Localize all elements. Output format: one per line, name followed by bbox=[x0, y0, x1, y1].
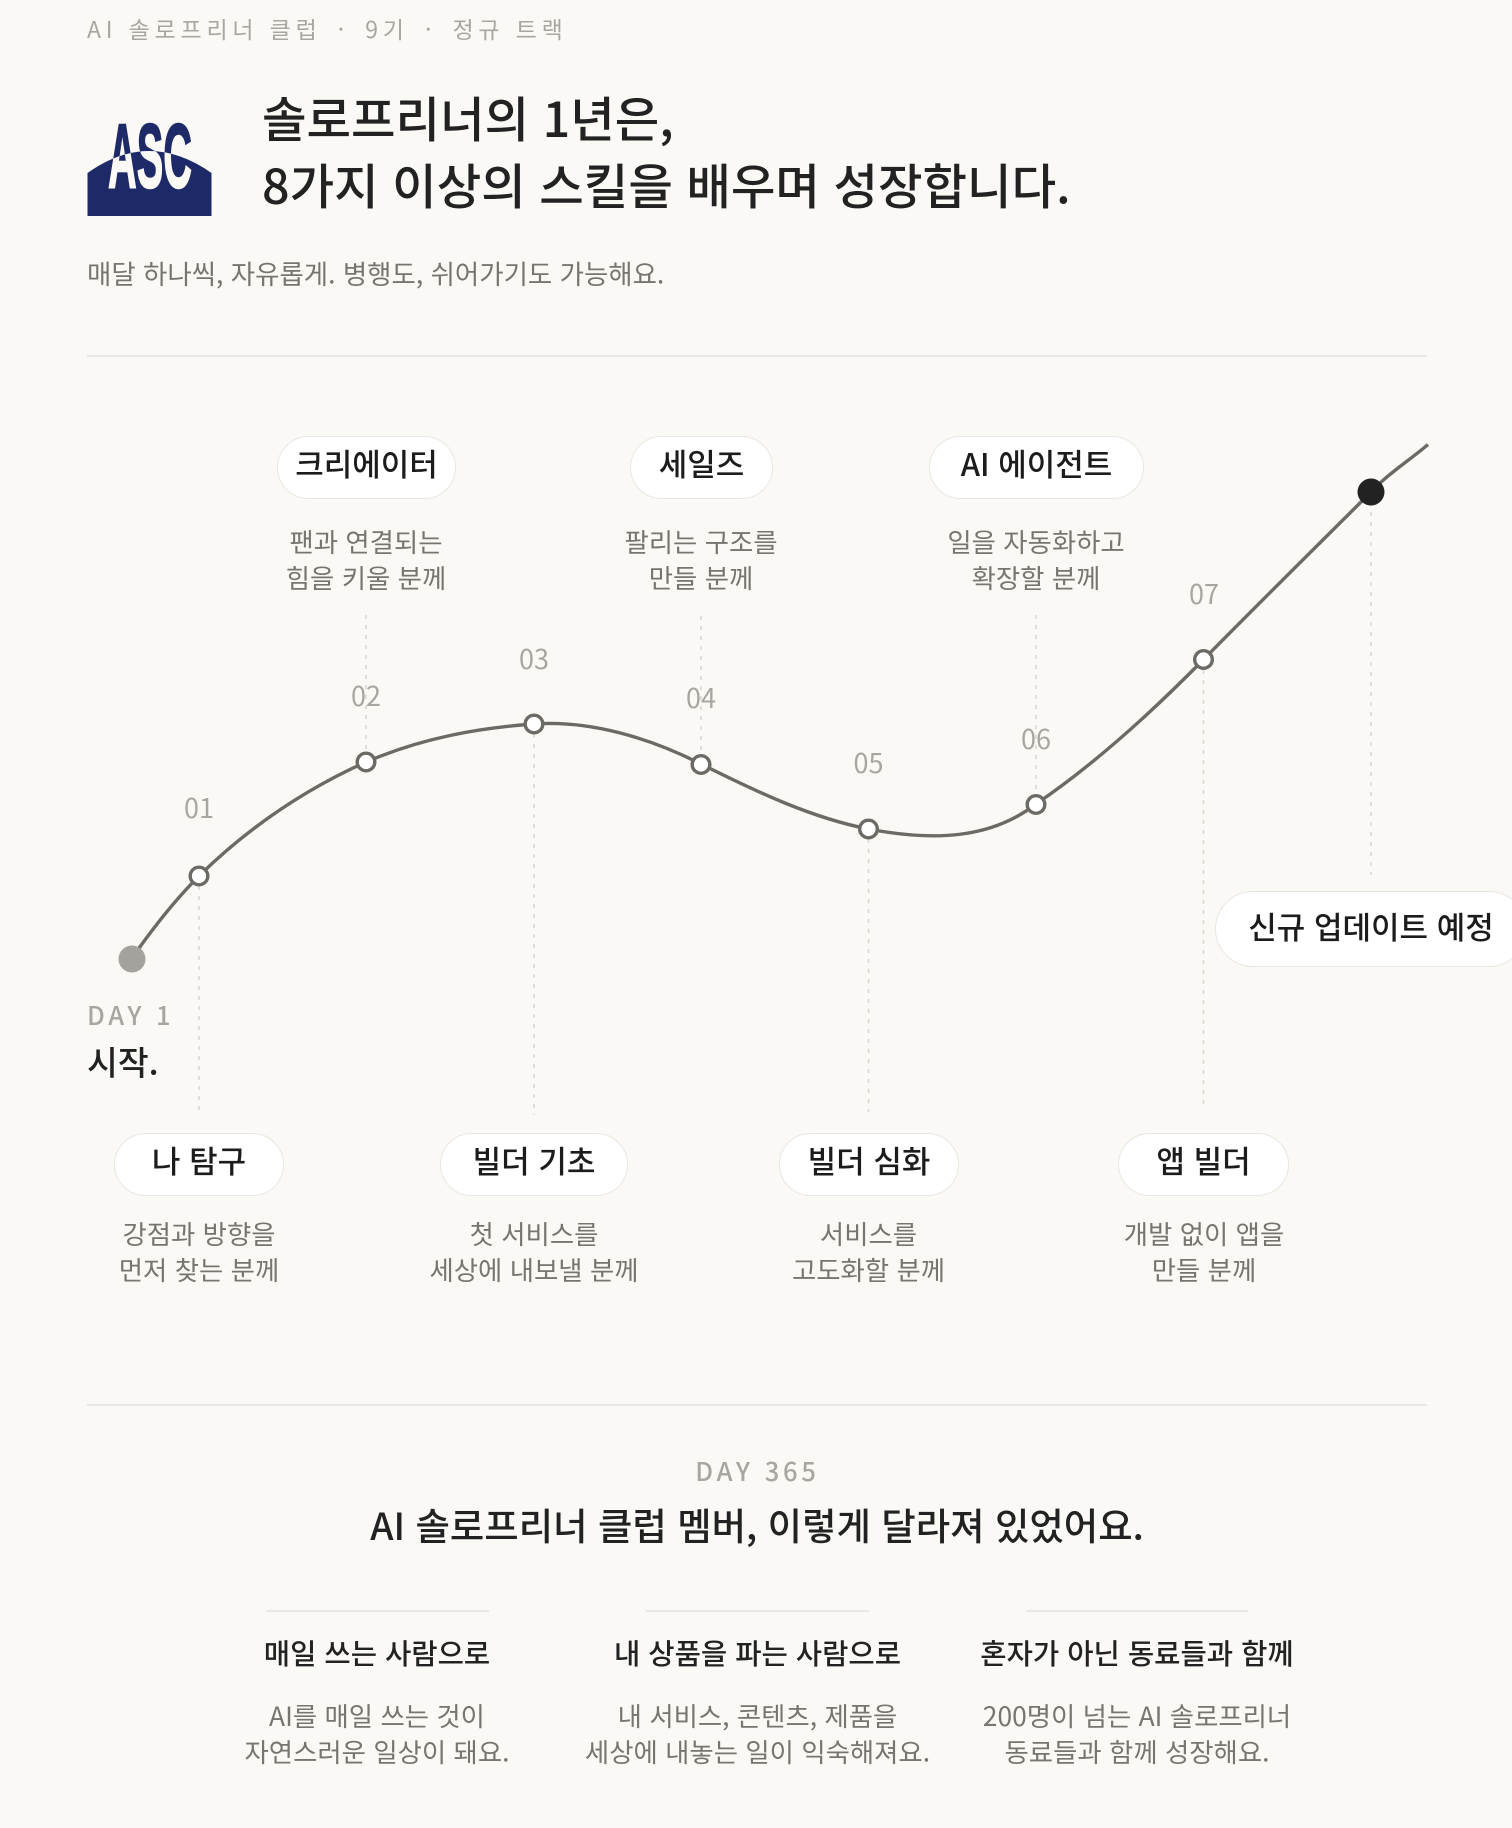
title bbox=[262, 81, 1071, 218]
pill: AI 에이전트 bbox=[929, 436, 1144, 499]
eyebrow label: AI 솔로프리너 클럽 · 9기 · 정규 트랙 bbox=[87, 11, 568, 45]
outcome 3 text: 동료들과 함께 성장해요. bbox=[1005, 1731, 1269, 1770]
pill: 빌더 심화: 빌더 심화 bbox=[808, 1137, 930, 1182]
title: 솔로프리너의 1년은, bbox=[262, 81, 674, 151]
pill: 빌더 기초 bbox=[440, 1133, 628, 1196]
top divider bbox=[87, 355, 1427, 357]
desc: 나 탐구 bbox=[119, 1212, 279, 1288]
title: 8가지 이상의 스킬을 배우며 성장합니다. bbox=[262, 148, 1071, 218]
outcome heading: AI 솔로프리너 클럽 멤버, 이렇게 달라져 있었어요. bbox=[370, 1497, 1144, 1551]
pill: 나 탐구: 나 탐구 bbox=[152, 1137, 246, 1182]
desc: 빌더 심화: 고도화할 분께 bbox=[792, 1248, 945, 1288]
outcome 3 text: 200명이 넘는 AI 솔로프리너 bbox=[983, 1695, 1291, 1734]
desc: 나 탐구: 강점과 방향을 bbox=[122, 1212, 276, 1252]
outcome 3 text bbox=[983, 1695, 1291, 1770]
pill: 앱 빌더 bbox=[1118, 1133, 1289, 1196]
outcome 1 title: 매일 쓰는 사람으로 bbox=[264, 1632, 490, 1673]
subtitle: 매달 하나씩, 자유롭게. 병행도, 쉬어가기도 가능해요. bbox=[87, 253, 664, 292]
growth curve chart bbox=[118, 443, 1429, 1115]
middle divider bbox=[87, 1404, 1427, 1406]
outcome 2 text: 내 서비스, 콘텐츠, 제품을 bbox=[618, 1695, 897, 1734]
outcome 2 text: 세상에 내놓는 일이 익숙해져요. bbox=[585, 1731, 930, 1770]
desc: 빌더 기초 bbox=[429, 1212, 639, 1288]
outcome 1 text bbox=[245, 1695, 509, 1770]
desc: 빌더 기초: 세상에 내보낼 분께 bbox=[429, 1248, 639, 1288]
pill: 세일즈 bbox=[630, 436, 773, 499]
day 365 label: DAY 365 bbox=[695, 1452, 820, 1489]
desc: 빌더 심화 bbox=[792, 1212, 945, 1288]
desc: 나 탐구: 먼저 찾는 분께 bbox=[119, 1248, 279, 1288]
outcome 2 text bbox=[585, 1695, 930, 1770]
pill: 크리에이터: 크리에이터 bbox=[295, 440, 438, 485]
desc: 크리에이터: 힘을 키울 분께 bbox=[286, 556, 446, 596]
pill: 앱 빌더: 앱 빌더 bbox=[1156, 1137, 1251, 1182]
outcome 1 text: 자연스러운 일상이 돼요. bbox=[245, 1731, 509, 1770]
pill: 빌더 심화 bbox=[779, 1133, 959, 1196]
desc: 크리에이터: 팬과 연결되는 bbox=[289, 520, 443, 560]
desc: 세일즈: 만들 분께 bbox=[649, 556, 753, 596]
step number 06: 06 bbox=[1021, 718, 1051, 757]
desc: 크리에이터 bbox=[286, 520, 446, 596]
start label: 시작. bbox=[87, 1036, 159, 1085]
rule: column 1 bbox=[266, 1610, 489, 1612]
desc: 빌더 기초: 첫 서비스를 bbox=[470, 1212, 598, 1252]
pill: 크리에이터 bbox=[277, 436, 456, 499]
desc: 빌더 심화: 서비스를 bbox=[820, 1212, 917, 1252]
pill: AI 에이전트: AI 에이전트 bbox=[961, 440, 1112, 485]
desc: AI 에이전트 bbox=[947, 520, 1125, 596]
desc: 앱 빌더: 만들 분께 bbox=[1152, 1248, 1256, 1288]
outcome 3 title: 혼자가 아닌 동료들과 함께 bbox=[980, 1632, 1294, 1673]
desc: AI 에이전트: 확장할 분께 bbox=[972, 556, 1100, 596]
pill: 신규 업데이트 예정: 신규 업데이트 예정 bbox=[1248, 903, 1494, 948]
step number 07: 07 bbox=[1189, 573, 1219, 612]
pill: 나 탐구 bbox=[114, 1133, 284, 1196]
pill: 세일즈: 세일즈 bbox=[659, 440, 744, 485]
step number 05: 05 bbox=[854, 742, 883, 781]
rule: column 3 bbox=[1026, 1610, 1248, 1612]
step number 04: 04 bbox=[686, 677, 716, 716]
step number 03: 03 bbox=[519, 638, 549, 677]
desc: 세일즈 bbox=[624, 520, 778, 596]
desc: AI 에이전트: 일을 자동화하고 bbox=[947, 520, 1125, 560]
outcome 2 title: 내 상품을 파는 사람으로 bbox=[614, 1632, 901, 1673]
step number 02: 02 bbox=[351, 675, 381, 714]
pill: 빌더 기초: 빌더 기초 bbox=[473, 1137, 595, 1182]
outcome 1 text: AI를 매일 쓰는 것이 bbox=[269, 1695, 485, 1734]
rule: column 2 bbox=[646, 1610, 869, 1612]
step number 01: 01 bbox=[184, 787, 214, 826]
day 1 label: DAY 1 bbox=[87, 996, 174, 1033]
pill: 신규 업데이트 예정 bbox=[1215, 891, 1512, 967]
desc: 앱 빌더: 개발 없이 앱을 bbox=[1124, 1212, 1284, 1252]
desc: 앱 빌더 bbox=[1124, 1212, 1284, 1288]
desc: 세일즈: 팔리는 구조를 bbox=[624, 520, 778, 560]
